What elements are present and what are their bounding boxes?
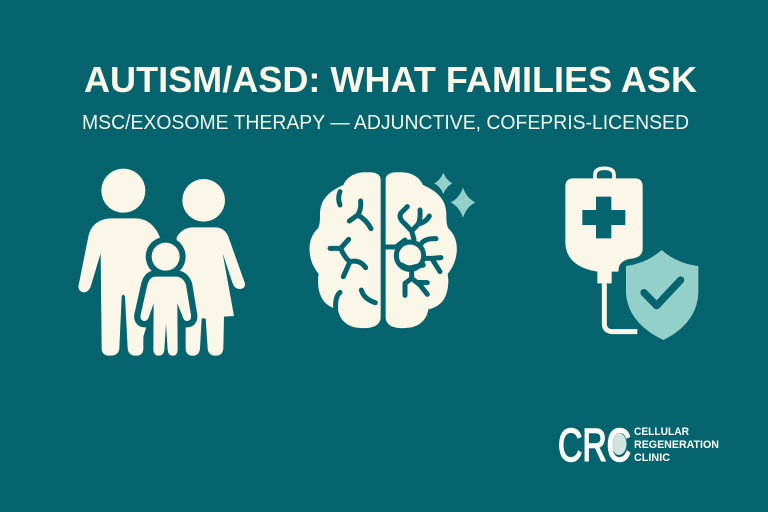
logo: Cellular Regeneration Clinic: CELLULAR — [634, 426, 689, 438]
logo: Cellular Regeneration Clinic: CRC — [558, 419, 631, 471]
icon: brain with neural branches — [309, 172, 475, 328]
logo: Cellular Regeneration Clinic: CLINIC — [634, 452, 670, 464]
icon: family — [78, 169, 245, 356]
subtitle: MSC/EXOSOME THERAPY — ADJUNCTIVE, COFEPRIS-LICENSED — [82, 111, 689, 134]
title: AUTISM/ASD: WHAT FAMILIES ASK — [84, 59, 697, 100]
icon: IV bag with shield — [565, 168, 698, 340]
logo: Cellular Regeneration Clinic — [558, 419, 719, 471]
logo: Cellular Regeneration Clinic: REGENERATION — [634, 439, 719, 451]
